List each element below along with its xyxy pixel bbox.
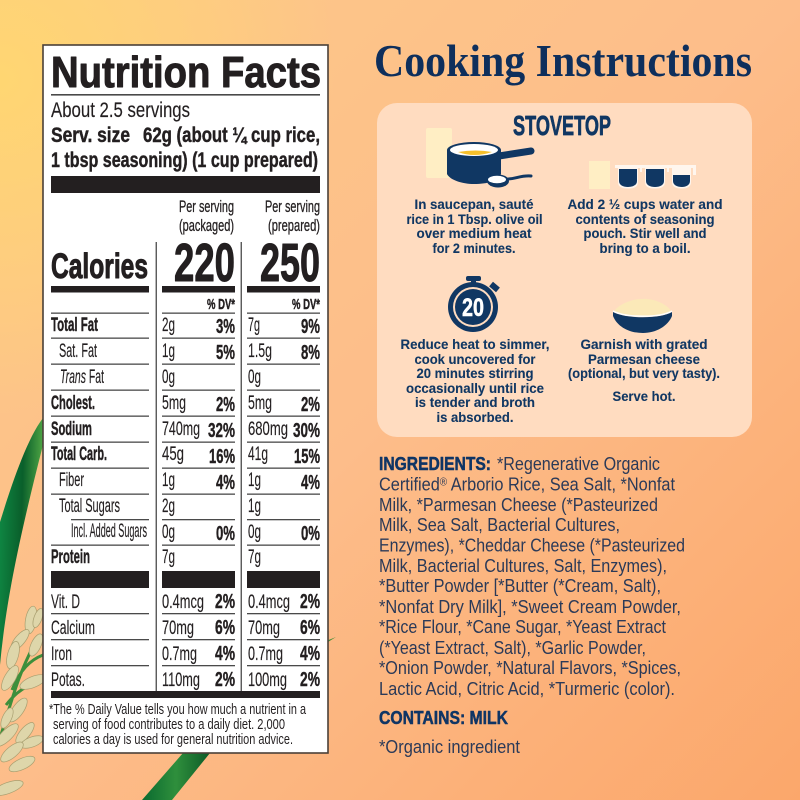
text block: ingredients: Lactic Acid, Citric Acid, *Turmeric (color). xyxy=(379,679,675,699)
row: cholesterol: 2% xyxy=(301,394,320,416)
row: total carbohydrate: Total Carb. xyxy=(51,443,107,465)
heading: Nutrition Facts: Nutrition Facts xyxy=(51,48,321,97)
row: calcium: 70mg xyxy=(162,617,194,639)
row: cholesterol: 2% xyxy=(216,394,235,416)
text: step 3 xyxy=(400,337,550,425)
text block: ingredients: Arborio Rice, Sea Salt, *Nonfat xyxy=(447,474,675,494)
row: protein: 7g xyxy=(162,546,175,568)
servings info: Serv. size xyxy=(51,124,130,147)
row: vitamin D: 0.4mcg xyxy=(248,591,290,613)
footnote: serving of food contributes to a daily diet. 2,000 xyxy=(53,716,285,733)
row: iron: 0.7mg xyxy=(248,643,283,665)
row: added sugars xyxy=(71,520,320,545)
text: step 3: cook uncovered for xyxy=(414,352,536,367)
text: step 4: Parmesan cheese xyxy=(588,352,700,367)
column headers xyxy=(179,197,320,235)
row: total fat: Total Fat xyxy=(51,314,98,336)
footnote: *The % Daily Value tells you how much a nutrient in a xyxy=(49,701,306,718)
row: total sugars: Total Sugars xyxy=(59,495,120,517)
text: step 1: for 2 minutes. xyxy=(432,241,516,256)
row: sodium: 680mg xyxy=(248,418,288,440)
calories row: 250 xyxy=(260,233,320,293)
row: potassium: 2% xyxy=(215,669,235,691)
row: total fat: 7g xyxy=(248,314,260,336)
row: iron: 4% xyxy=(215,643,235,665)
servings info: About 2.5 servings xyxy=(51,99,190,122)
text: step 2: bring to a boil. xyxy=(600,241,690,256)
row: sodium: 30% xyxy=(293,420,320,442)
row: saturated fat xyxy=(59,340,320,364)
calories row xyxy=(51,233,320,313)
footnote: calories a day is used for general nutrition advice. xyxy=(53,731,293,748)
icon: bowl of rice xyxy=(613,299,672,333)
row: added sugars: 0% xyxy=(301,523,320,545)
row: fiber: Fiber xyxy=(59,469,84,491)
servings info: 1 tbsp seasoning) (1 cup prepared) xyxy=(51,149,318,172)
row: saturated fat: 1g xyxy=(162,340,175,362)
row: saturated fat: 1.5g xyxy=(248,340,272,362)
text block: ingredients: (*Yeast Extract, Salt), *Garlic Powder, xyxy=(379,638,646,658)
calories row: % DV* xyxy=(292,296,320,313)
row: vitamin D xyxy=(51,591,320,613)
icon: timer 20 minutes xyxy=(448,276,500,332)
text: step 4: Serve hot. xyxy=(612,389,676,404)
row: iron: 0.7mg xyxy=(162,643,197,665)
row: sodium: 32% xyxy=(208,420,235,442)
row: fiber: 1g xyxy=(248,469,261,491)
row: trans fat: 0g xyxy=(162,366,175,388)
black divider bars xyxy=(51,571,320,588)
row: vitamin D: 0.4mcg xyxy=(162,591,204,613)
column headers: Per serving xyxy=(265,197,320,216)
text: step 3: is absorbed. xyxy=(436,410,514,425)
row: trans fat: 0g xyxy=(248,366,261,388)
text: step 2: pouch. Stir well and xyxy=(584,226,706,241)
row: fiber: 4% xyxy=(301,472,320,494)
row: trans fat xyxy=(60,366,261,388)
allergen statement: CONTAINS: MILK xyxy=(379,708,508,728)
row: saturated fat: 8% xyxy=(301,342,320,364)
text block: ingredients: Milk, *Parmesan Cheese (*Pasteurized xyxy=(379,495,658,515)
row: potassium xyxy=(51,669,320,691)
row: calcium: 6% xyxy=(300,617,320,639)
text block: ingredients: INGREDIENTS: xyxy=(379,454,491,474)
row: calcium: 70mg xyxy=(248,617,280,639)
row: total carbohydrate: 16% xyxy=(209,446,235,468)
row: protein: Protein xyxy=(51,546,90,568)
text block: ingredients: Milk, Bacterial Cultures, Salt, Enzymes), xyxy=(379,556,667,576)
row: calcium: 6% xyxy=(215,617,235,639)
row: total carbohydrate xyxy=(51,443,320,468)
text block: ingredients: Enzymes), *Cheddar Cheese (*Pasteurized xyxy=(379,536,685,556)
text block: ingredients: Milk, Sea Salt, Bacterial Cultures, xyxy=(379,515,620,535)
row: total fat: 2g xyxy=(162,314,175,336)
footnote xyxy=(49,701,306,748)
text: step 3: Reduce heat to simmer, xyxy=(400,337,550,352)
text block: ingredients: *Regenerative Organic xyxy=(497,454,660,474)
row: potassium: Potas. xyxy=(51,669,85,691)
servings info: 62g (about ¼ cup rice, xyxy=(143,124,320,147)
text block: ingredients: Certified xyxy=(379,474,446,494)
row: total sugars: 1g xyxy=(248,495,261,517)
text block: ingredients xyxy=(379,454,685,699)
text: step 3: 20 minutes stirring xyxy=(416,366,534,381)
text: step 1 xyxy=(406,197,542,256)
panel: nutrition facts xyxy=(43,45,328,753)
row: sodium: Sodium xyxy=(51,418,92,440)
row: fiber: 4% xyxy=(216,472,235,494)
row: potassium: 110mg xyxy=(162,669,200,691)
organic footnote: *Organic ingredient xyxy=(379,737,520,757)
text: step 1: In saucepan, sauté xyxy=(414,197,534,212)
row: added sugars: 0g xyxy=(162,521,175,543)
icon: timer 20 minutes: 20 xyxy=(462,294,484,322)
row: protein: 7g xyxy=(248,546,261,568)
calories row: % DV* xyxy=(207,296,235,313)
row: cholesterol: 5mg xyxy=(162,392,186,414)
row: cholesterol: Cholest. xyxy=(51,392,95,414)
row: total fat: 9% xyxy=(301,316,320,338)
heading: Cooking Instructions: Cooking Instructions xyxy=(374,35,752,86)
column headers: Per serving xyxy=(179,197,234,216)
row: total sugars xyxy=(59,495,261,517)
text block: ingredients: *Butter Powder [*Butter (*Cream, Salt), xyxy=(379,576,661,596)
text: step 4: (optional, but very tasty). xyxy=(568,366,720,381)
column headers: (packaged) xyxy=(179,216,234,235)
row: added sugars: 0% xyxy=(216,523,235,545)
calories row: Calories xyxy=(51,247,148,286)
row: total sugars: 2g xyxy=(162,495,175,517)
row: iron xyxy=(51,643,320,665)
row: iron: 4% xyxy=(300,643,320,665)
row: cholesterol xyxy=(51,392,320,416)
row: calcium xyxy=(51,617,320,639)
table rules xyxy=(51,242,320,693)
icon: saucepan with spoon xyxy=(426,128,531,188)
text: step 1: rice in 1 Tbsp. olive oil xyxy=(406,212,542,227)
row: saturated fat: 5% xyxy=(216,342,235,364)
illustration: rice leaves and grain stalk xyxy=(0,418,336,800)
row: fiber xyxy=(59,469,320,494)
row: total fat xyxy=(51,314,320,338)
text block: ingredients: *Rice Flour, *Cane Sugar, *Yeast Extract xyxy=(379,617,666,637)
text: step 4: Garnish with grated xyxy=(580,337,708,352)
row: vitamin D: 2% xyxy=(300,591,320,613)
text: step 1: over medium heat xyxy=(416,226,532,241)
row: vitamin D: Vit. D xyxy=(51,591,80,613)
text: step 3: is tender and broth xyxy=(415,395,535,410)
row: trans fat: Trans Fat xyxy=(60,366,104,388)
text: step 4 xyxy=(568,337,720,404)
row: total carbohydrate: 45g xyxy=(162,443,184,465)
calories row: 220 xyxy=(174,233,235,293)
panel: stovetop xyxy=(377,103,752,437)
row: protein xyxy=(51,546,261,568)
row: potassium: 100mg xyxy=(248,669,287,691)
row: total carbohydrate: 41g xyxy=(248,443,268,465)
heading: stovetop: STOVETOP xyxy=(513,110,611,141)
row: saturated fat: Sat. Fat xyxy=(59,340,97,362)
row: total fat: 3% xyxy=(216,316,235,338)
row: potassium: 2% xyxy=(300,669,320,691)
icon: measuring cups xyxy=(589,161,696,189)
row: iron: Iron xyxy=(51,643,72,665)
row: total carbohydrate: 15% xyxy=(294,446,320,468)
row: sodium xyxy=(51,418,320,442)
text: step 2 xyxy=(568,197,722,256)
text: step 2: contents of seasoning xyxy=(576,212,714,227)
text: step 3: occasionally until rice xyxy=(406,381,544,396)
servings info xyxy=(51,99,320,172)
text: step 2: Add 2 ½ cups water and xyxy=(568,197,722,212)
row: added sugars: 0g xyxy=(248,521,261,543)
text block: ingredients: ® xyxy=(440,476,447,488)
row: fiber: 1g xyxy=(162,469,175,491)
row: added sugars: Incl. Added Sugars xyxy=(71,520,147,542)
column headers: (prepared) xyxy=(268,216,320,235)
text block: ingredients: *Onion Powder, *Natural Flavors, *Spices, xyxy=(379,658,681,678)
row: calcium: Calcium xyxy=(51,617,95,639)
row: vitamin D: 2% xyxy=(215,591,235,613)
text block: ingredients: *Nonfat Dry Milk], *Sweet Cream Powder, xyxy=(379,597,681,617)
row: cholesterol: 5mg xyxy=(248,392,272,414)
row: sodium: 740mg xyxy=(162,418,200,440)
